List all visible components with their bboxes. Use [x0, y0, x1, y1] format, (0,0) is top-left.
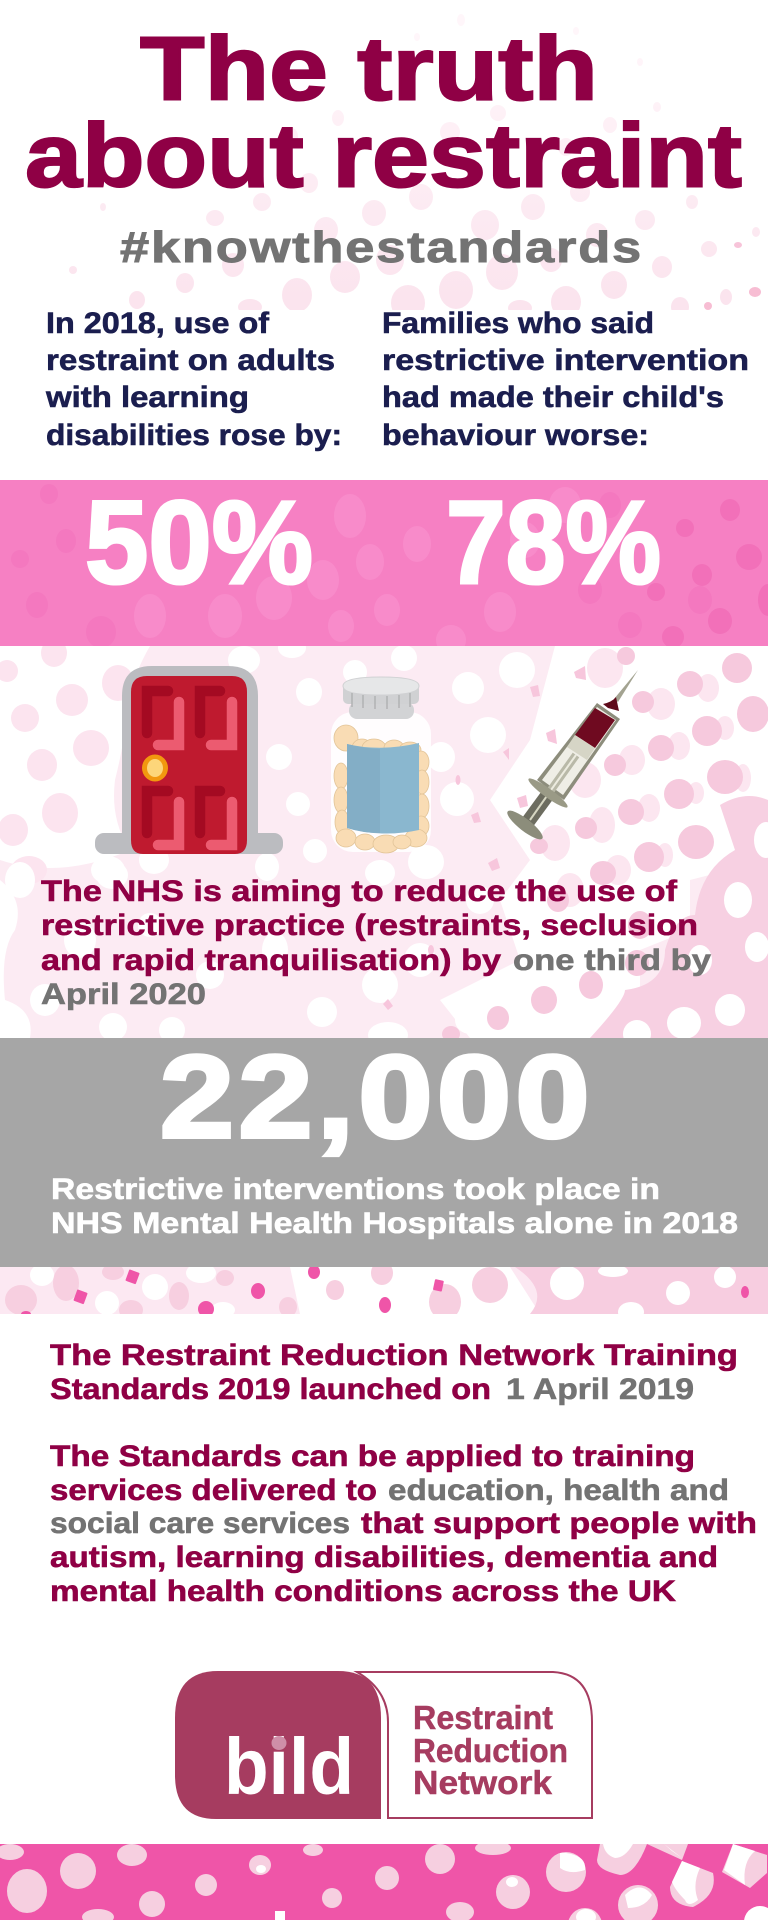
text: families intro: restrictive intervention [382, 344, 749, 377]
logo name: Reduction [413, 1732, 568, 1769]
logo name [413, 1699, 568, 1801]
text: training standards launch: 1 April 2019 [506, 1373, 694, 1406]
title: The truth [140, 20, 598, 120]
text: NHS reduction target: The NHS is aiming to reduce the use of [41, 875, 678, 908]
logo: bild Restraint Reduction Network [175, 1671, 592, 1819]
icon: pill bottle [331, 677, 431, 853]
text: restraint rise intro: with learning [45, 381, 249, 414]
text: restraint rise intro: disabilities rose by: [46, 419, 342, 452]
statistic: 78%: 78% [446, 477, 661, 609]
text: standards scope: that support people with [361, 1507, 757, 1540]
statistic: 22,000: 22,000 [160, 1031, 594, 1162]
title: about restraint [25, 106, 742, 206]
panel: grey statistic band [0, 1031, 768, 1267]
text: NHS reduction target: restrictive practice (restraints, seclusion [41, 909, 698, 942]
text: training standards launch: The Restraint Reduction Network Training [50, 1339, 738, 1372]
text: families intro: had made their child's [382, 381, 724, 414]
logo name: Restraint [413, 1699, 553, 1736]
text: standards scope: autism, learning disabilities, dementia and [50, 1541, 718, 1574]
text: standards scope: The Standards can be applied to training [50, 1440, 695, 1473]
text: standards scope [50, 1440, 757, 1608]
text: standards scope: education, health and [388, 1474, 729, 1507]
background pattern: top faint dots [69, 14, 761, 321]
text: NHS reduction target: April 2020 [41, 978, 206, 1011]
icon: syringe [504, 670, 638, 843]
text: standards scope: services delivered to [50, 1474, 377, 1507]
logo wordmark: bild: bild [224, 1722, 354, 1811]
title [25, 20, 742, 206]
text: standards scope: social care services [50, 1507, 350, 1540]
background pattern: middle dots [0, 638, 768, 1048]
text: NHS reduction target: and rapid tranquilisation) by [41, 944, 501, 977]
text: NHS reduction target [41, 875, 711, 1011]
text: training standards launch [50, 1339, 738, 1406]
text: restrictive interventions caption: Restrictive interventions took place in [51, 1173, 660, 1206]
text: training standards launch: Standards 2019 launched on [50, 1373, 491, 1406]
hashtag: #knowthestandards [120, 223, 643, 272]
text: families intro [382, 307, 749, 452]
background pattern: footer dotted band [0, 1841, 768, 1920]
statistic: 50%: 50% [85, 477, 313, 609]
text: restrictive interventions caption [51, 1173, 738, 1240]
text: standards scope: mental health conditions across the UK [50, 1575, 676, 1608]
text: families intro: Families who said [382, 307, 654, 340]
logo name: Network [413, 1764, 553, 1801]
text: NHS reduction target: one third by [513, 944, 711, 977]
background pattern: lower dotted strip [0, 1267, 768, 1314]
text: restraint rise intro: In 2018, use of [46, 307, 270, 340]
text: restrictive interventions caption: NHS Mental Health Hospitals alone in 2018 [51, 1207, 738, 1240]
text: restraint rise intro: restraint on adults [46, 344, 335, 377]
text: restraint rise intro [45, 307, 342, 452]
panel: pink statistics band [0, 477, 768, 655]
text: families intro: behaviour worse: [382, 419, 649, 452]
icon: door [95, 666, 283, 854]
